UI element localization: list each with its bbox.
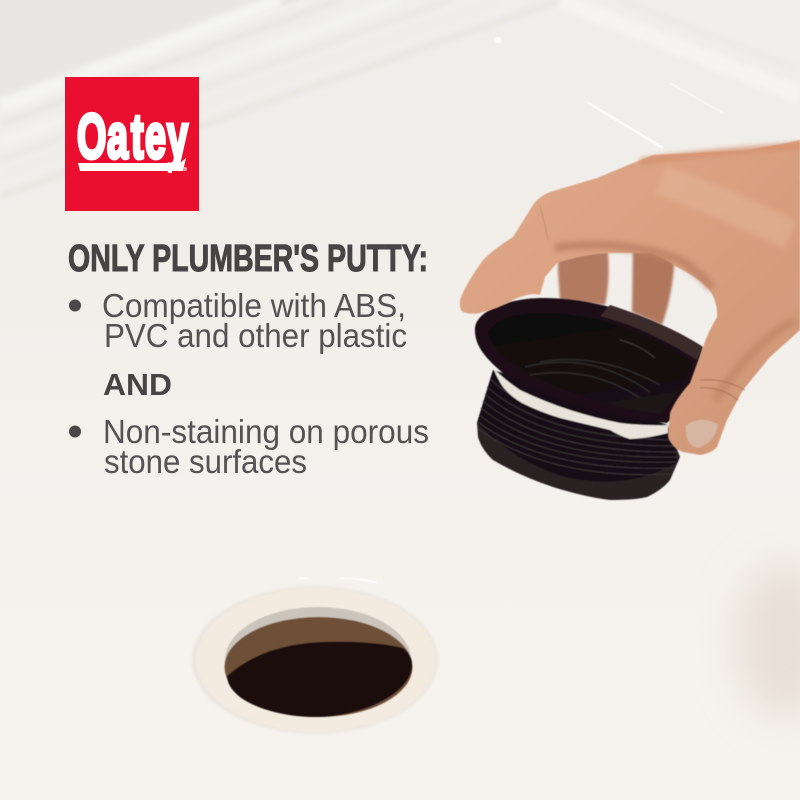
hand holding drain fitting [460, 140, 800, 500]
bullet 2: Non-staining on porous [103, 413, 429, 450]
drain hole [192, 578, 438, 734]
putty band [493, 368, 668, 439]
connector word: AND [103, 368, 172, 402]
back fingers [558, 240, 676, 325]
drain flange [192, 586, 438, 734]
drain opening [224, 607, 412, 717]
upper wall shade [0, 0, 300, 105]
inner threads [525, 340, 660, 398]
knuckle creases [540, 205, 745, 400]
bullet 1 [69, 287, 407, 354]
hand and thumb [460, 140, 800, 455]
thumb nail [686, 420, 718, 448]
heading: ONLY PLUMBER'S PUTTY: [68, 238, 428, 280]
rim highlight [600, 305, 703, 360]
bullet 2: stone surfaces [104, 443, 307, 480]
specular highlights [587, 83, 723, 148]
bullet 1: PVC and other plastic [104, 317, 407, 354]
logo: Oatey: Oatey [77, 102, 188, 173]
beige wash lower right [735, 560, 800, 720]
inner cavity [488, 313, 692, 414]
skin shading [555, 146, 800, 400]
bullet 1: Compatible with ABS, [102, 287, 406, 324]
logo: Oatey [65, 77, 199, 211]
bullet list [69, 287, 429, 480]
threaded body [477, 370, 680, 500]
drain fitting [475, 298, 703, 500]
flange rim [475, 298, 703, 423]
bullet 2 [69, 413, 429, 480]
moulding bands [0, 0, 800, 196]
